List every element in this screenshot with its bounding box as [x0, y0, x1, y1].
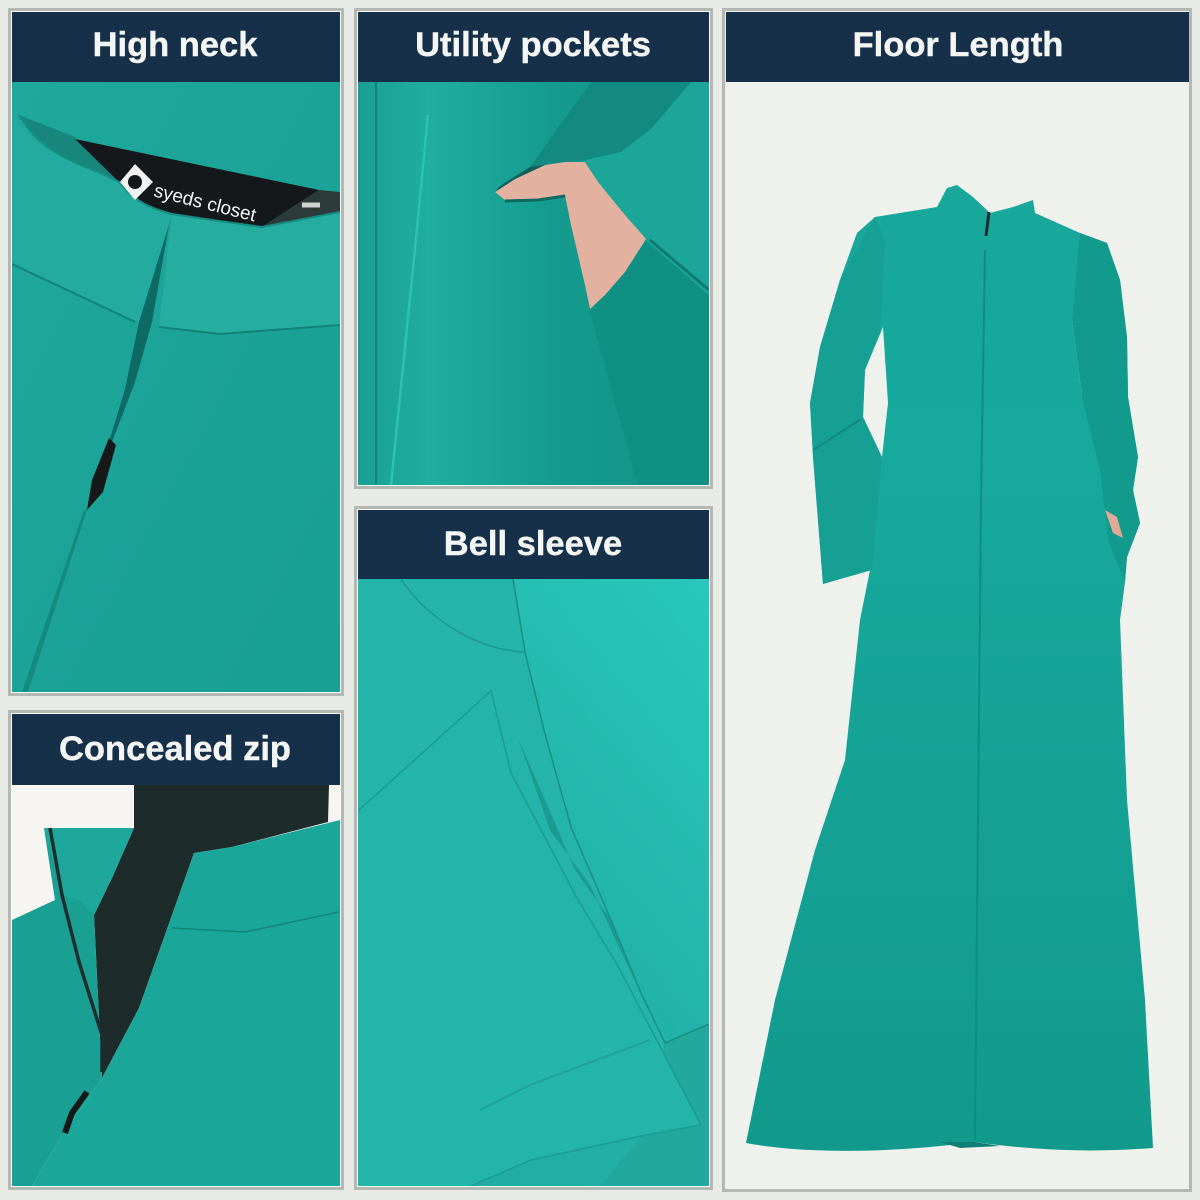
logo on neck label — [120, 164, 259, 226]
icon: hand — [495, 162, 646, 309]
photo: concealed zip detail — [12, 785, 340, 1186]
panel: utility pockets — [356, 10, 712, 488]
photo: high neck collar detail — [12, 82, 340, 692]
photo: full length teal dress — [746, 185, 1153, 1151]
panel: floor length — [724, 10, 1190, 1190]
heading: Floor Length — [726, 12, 1189, 82]
photo: bell sleeve detail — [358, 579, 709, 1186]
logo on neck label: syeds closet — [152, 181, 259, 226]
panel: bell sleeve — [356, 508, 712, 1188]
heading: Concealed zip — [12, 714, 340, 785]
heading: Floor Length: Floor Length — [853, 26, 1063, 64]
heading: High neck — [12, 12, 340, 82]
heading: Utility pockets: Utility pockets — [415, 26, 651, 64]
heading: Bell sleeve: Bell sleeve — [444, 525, 622, 563]
panel: concealed zip — [10, 712, 342, 1188]
heading: Bell sleeve — [358, 510, 709, 579]
heading: High neck: High neck — [93, 26, 258, 64]
photo: hand in pocket — [358, 82, 709, 485]
heading: Utility pockets — [358, 12, 709, 82]
panel: high neck — [10, 10, 342, 694]
heading: Concealed zip: Concealed zip — [59, 730, 291, 768]
